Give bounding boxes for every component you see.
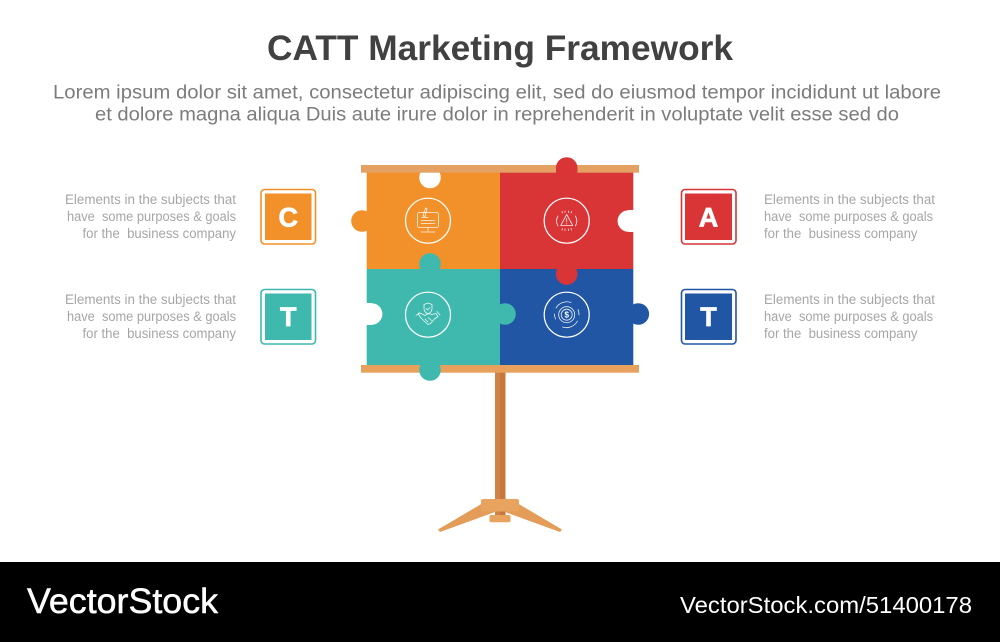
letter box: T teal: [261, 290, 316, 344]
letter box: T teal: T: [280, 302, 297, 332]
right text: T: Elements in the subjects that: [764, 292, 935, 307]
jigsaw board: [351, 157, 649, 381]
icon: dollar cycle: [544, 292, 589, 337]
board stand: [438, 372, 562, 532]
puzzle notches: [361, 167, 639, 325]
letter box: A: [682, 190, 736, 244]
right text: T: for the business company: [764, 326, 918, 341]
letter box: T blue: [682, 290, 736, 344]
bottom rail: [361, 365, 639, 373]
left text: T: [65, 292, 236, 341]
footer bar: [0, 562, 1000, 642]
letter box: C: C: [278, 202, 298, 232]
letter box: T blue: T: [700, 302, 717, 332]
subtitle text: [53, 82, 941, 126]
puzzle piece: orange: [351, 172, 500, 269]
right text: A: [764, 192, 935, 241]
puzzle piece: blue: [500, 269, 649, 366]
right text: T: [764, 292, 935, 341]
left text: C: [65, 192, 236, 241]
title: CATT Marketing Framework: [267, 29, 734, 68]
right text: A: have some purposes & goals: [764, 209, 933, 224]
left text: C: have some purposes & goals: [67, 209, 236, 224]
footer logo: VectorStock: [27, 582, 219, 621]
puzzle piece: red: [500, 172, 633, 269]
left text: C: for the business company: [82, 226, 236, 241]
right text: A: Elements in the subjects that: [764, 192, 935, 207]
icon: warning triangle: [544, 198, 589, 243]
top rail: [361, 165, 639, 173]
letter box: C: [261, 190, 316, 244]
right text: A: for the business company: [764, 226, 918, 241]
letter box: A: A: [699, 202, 718, 232]
left text: T: have some purposes & goals: [67, 309, 236, 324]
right text: T: have some purposes & goals: [764, 309, 933, 324]
left text: T: for the business company: [82, 326, 236, 341]
left text: C: Elements in the subjects that: [65, 192, 236, 207]
subtitle text: et dolore magna aliqua Duis aute irure dolor in reprehenderit in voluptate velit esse sed do: [95, 104, 899, 126]
subtitle text: Lorem ipsum dolor sit amet, consectetur adipiscing elit, sed do eiusmod tempor incididunt ut labore: [53, 82, 941, 104]
icon: monitor with pen: [406, 198, 450, 243]
puzzle tabs overlapping neighbours: [419, 157, 578, 381]
icon: handshake with shield: [406, 292, 450, 337]
left text: T: Elements in the subjects that: [65, 292, 236, 307]
footer image id: VectorStock.com/51400178: [680, 592, 972, 618]
icon: dollar cycle: $: [564, 311, 569, 320]
puzzle piece: teal: [367, 269, 500, 366]
